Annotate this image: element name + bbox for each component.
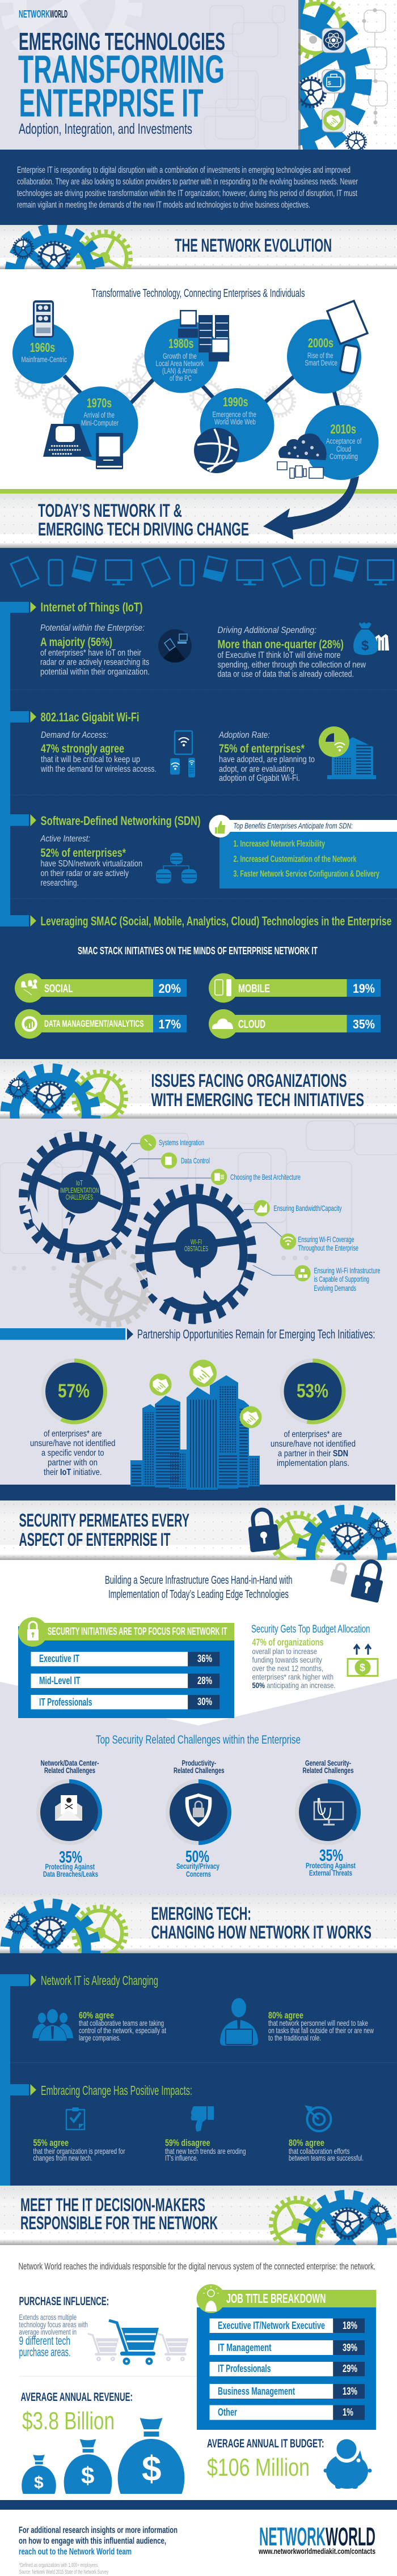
icon: briefcase tile: $ bbox=[328, 80, 331, 87]
chart: productivity challenges bbox=[168, 1759, 229, 1878]
bar: data analytics: DATA MANAGEMENT/ANALYTICS bbox=[44, 1018, 144, 1029]
footer: call to action: reach out to the Network World team bbox=[19, 2547, 132, 2557]
icon: handshake small right bbox=[239, 1406, 262, 1428]
heading: emerging tech: EMERGING TECH: bbox=[151, 1903, 251, 1924]
band: dark footer of issues bbox=[0, 1485, 395, 1500]
icon: terminal bbox=[43, 424, 92, 457]
bar: mobile: 19% bbox=[353, 981, 375, 996]
text: 55 percent agree bbox=[33, 2137, 125, 2162]
icon: team bbox=[32, 2009, 73, 2041]
donut: 53 percent bbox=[282, 1361, 344, 1422]
text: 57 percent detail: unsure/have not identified bbox=[30, 1439, 116, 1448]
text: 80 percent agree collaboration: 80% agree bbox=[289, 2137, 324, 2148]
gear: wi-fi obstacles: OBSTACLES bbox=[184, 1245, 208, 1253]
text: 80 percent agree collaboration: that collaboration efforts bbox=[289, 2146, 349, 2156]
panel: purchase influence: average involvement in bbox=[19, 2328, 77, 2336]
chart: general security challenges: General Security- bbox=[305, 1759, 351, 1767]
row: executive IT network executive: Executive IT/Network Executive bbox=[218, 2320, 325, 2331]
heading: today's network IT: EMERGING TECH DRIVING CHANGE bbox=[38, 519, 249, 539]
section: gigabit wifi: adopt, or are evaluating bbox=[219, 764, 294, 774]
section: gigabit wifi: adoption of Gigabit Wi-Fi. bbox=[219, 773, 300, 783]
icon: shield lock bbox=[185, 1793, 212, 1827]
heading: meet the IT decision-makers: RESPONSIBLE FOR THE NETWORK bbox=[20, 2213, 218, 2233]
icon: lock white bbox=[27, 1622, 39, 1640]
section: SDN bbox=[40, 814, 397, 889]
panel: security bbox=[0, 1558, 397, 1894]
chart: productivity challenges: 50% bbox=[185, 1848, 209, 1866]
row: other: 1% bbox=[343, 2407, 353, 2418]
text: 53 percent detail: of enterprises* are bbox=[284, 1430, 342, 1439]
gear: IoT implementation challenges: IMPLEMENTATION bbox=[60, 1187, 99, 1195]
text: 80 percent agree collaboration bbox=[289, 2137, 364, 2162]
icon: thumbs down bbox=[191, 2106, 214, 2132]
chart: network data center challenges: Related Challenges bbox=[44, 1766, 95, 1775]
panel: security initiatives table: SECURITY INITIATIVES ARE TOP FOCUS FOR NETWORK IT bbox=[48, 1626, 227, 1637]
text: 57 percent detail: partner with on bbox=[48, 1458, 98, 1468]
labels: timeline text: Emergence of the bbox=[212, 410, 256, 419]
text: 59 percent disagree: IT’s influence. bbox=[165, 2153, 198, 2162]
labels: timeline text: Smart Device bbox=[305, 359, 337, 367]
icon: cloud and devices bbox=[277, 433, 327, 478]
heading: meet the IT decision-makers bbox=[20, 2195, 218, 2233]
footer: call to action: For additional research insights or more information bbox=[19, 2526, 178, 2535]
chart: general security challenges: Related Challenges bbox=[303, 1766, 354, 1775]
heading: issues bbox=[151, 1070, 364, 1110]
row: IT management: IT Management bbox=[218, 2342, 271, 2353]
subheading: secure infrastructure: Building a Secure Infrastructure Goes Hand-in-Hand with bbox=[105, 1574, 293, 1587]
gear: grey background bbox=[73, 1249, 150, 1326]
stat: average annual revenue bbox=[20, 2391, 184, 2494]
labels: timeline text: 2000s bbox=[308, 335, 333, 350]
text: 60 percent agree bbox=[79, 2010, 166, 2042]
text: top budget allocation: enterprises* rank higher with bbox=[252, 1672, 333, 1681]
section: SDN: have SDN/network virtualization bbox=[41, 859, 142, 869]
banner: emerging tech bbox=[0, 1894, 397, 1953]
bar: data analytics bbox=[15, 1009, 187, 1039]
text: 60 percent agree: 60% agree bbox=[79, 2010, 114, 2021]
timeline bar bbox=[0, 602, 36, 926]
chart: general security challenges: External Threats bbox=[309, 1869, 352, 1877]
icon: money with arrows: $ bbox=[360, 1662, 365, 1673]
icon: money bag and chart: $ bbox=[361, 638, 369, 653]
footer: source note bbox=[19, 2562, 108, 2575]
panel: hero header: WORLD bbox=[50, 8, 67, 20]
section: internet of things: Internet of Things (IoT) bbox=[41, 600, 143, 614]
text: top budget allocation: 50% anticipating an increase. bbox=[252, 1681, 336, 1690]
banner: the network evolution bbox=[0, 225, 397, 269]
donut: 57 percent bbox=[43, 1361, 105, 1422]
subtitle: Adoption, Integration, and Investments bbox=[19, 120, 192, 137]
panel: purchase influence: PURCHASE INFLUENCE: bbox=[19, 2295, 109, 2308]
section: internet of things: spending, either through the collection of new bbox=[218, 660, 366, 670]
heading: today's network IT bbox=[38, 500, 249, 539]
stat: average annual IT budget: AVERAGE ANNUAL IT BUDGET: bbox=[207, 2437, 324, 2450]
labels: timeline text bbox=[22, 335, 362, 461]
icon: tablet and smartphone bbox=[327, 301, 368, 374]
chart: productivity challenges: Productivity- bbox=[181, 1759, 216, 1767]
section: gigabit wifi: Demand for Access: bbox=[41, 730, 108, 740]
callouts: issue labels: Evolving Demands bbox=[314, 1283, 356, 1293]
labels: timeline text: 2010s bbox=[330, 422, 356, 436]
section: SDN: on their radar or are actively bbox=[41, 869, 129, 878]
icon: mini computer bbox=[96, 433, 123, 469]
panel: purchase influence bbox=[19, 2295, 188, 2365]
panel: job title breakdown bbox=[196, 2284, 377, 2430]
title: TRANSFORMING bbox=[18, 47, 225, 91]
labels: timeline text: Cloud bbox=[336, 445, 351, 453]
panel: purchase influence: purchase areas. bbox=[19, 2346, 70, 2359]
bar: cloud bbox=[209, 1009, 381, 1039]
row: executive IT: Executive IT bbox=[39, 1653, 79, 1664]
icon: atom tile bbox=[322, 28, 345, 53]
footer: logo and url: NETWORK bbox=[259, 2522, 326, 2551]
icon: monitor stethoscope bbox=[314, 1798, 343, 1825]
row: executive IT bbox=[31, 1652, 219, 1666]
icon: handshake large bbox=[189, 1360, 217, 1387]
labels: timeline text: of the PC bbox=[170, 374, 192, 382]
icons: device row bbox=[11, 556, 394, 586]
icon: building and pie bbox=[319, 726, 376, 779]
labels: timeline text: 1980s bbox=[168, 336, 194, 351]
panel: purchase influence: 9 different tech bbox=[19, 2335, 70, 2348]
illustration: city buildings bbox=[130, 1360, 262, 1490]
icon: radar bbox=[158, 629, 192, 663]
section: internet of things: A majority (56%) bbox=[40, 636, 112, 649]
callouts: issue labels: Data Control bbox=[181, 1156, 210, 1165]
row: business management bbox=[210, 2384, 365, 2399]
footer: source note: Source: Network World 2015 State of the Network Survey bbox=[19, 2569, 108, 2575]
text: 53 percent detail bbox=[271, 1430, 356, 1468]
section: gigabit wifi bbox=[40, 710, 376, 783]
heading: embracing change: Embracing Change Has Positive Impacts: bbox=[41, 2083, 192, 2098]
text: 80 percent agree: 80% agree bbox=[268, 2010, 303, 2021]
section: gigabit wifi: with the demand for wireless access. bbox=[40, 764, 157, 774]
icon: wifi devices bbox=[170, 731, 195, 777]
footer: call to action bbox=[19, 2526, 178, 2557]
row: other bbox=[210, 2405, 365, 2420]
icon: money bag and chart bbox=[353, 622, 389, 655]
icon: money bags: $ bbox=[34, 2473, 44, 2492]
icon: floating padlocks bbox=[330, 1558, 387, 1603]
bar: social: SOCIAL bbox=[44, 983, 73, 995]
icon: person with laptop bbox=[220, 1998, 258, 2046]
gear: wi-fi obstacles bbox=[136, 1189, 252, 1319]
section: gigabit wifi: 75% of enterprises* bbox=[219, 742, 305, 755]
icon: briefcase tile bbox=[322, 70, 345, 93]
title: EMERGING TECHNOLOGIES bbox=[19, 28, 225, 56]
row: IT professionals bbox=[31, 1695, 219, 1709]
row: IT professionals: 30% bbox=[197, 1696, 212, 1707]
section: gigabit wifi: that it will be critical to keep up bbox=[41, 755, 140, 764]
banner: issues bbox=[0, 1059, 397, 1119]
icon: target bbox=[305, 2106, 331, 2131]
text: 80 percent agree bbox=[268, 2010, 374, 2042]
chart: network data center challenges: Protecting Against bbox=[45, 1863, 95, 1871]
chart: general security challenges: 35% bbox=[319, 1847, 343, 1865]
labels: timeline text: Arrival of the bbox=[84, 411, 115, 419]
text: 53 percent detail: a partner in their SDN bbox=[278, 1449, 348, 1459]
section: internet of things: potential within their organization. bbox=[40, 668, 150, 677]
bar: social: 20% bbox=[159, 981, 181, 996]
panel: hero header bbox=[0, 0, 397, 153]
chart: productivity challenges: Related Challenges bbox=[174, 1766, 225, 1775]
labels: timeline text: Computing bbox=[330, 452, 358, 461]
row: other: Other bbox=[218, 2407, 237, 2418]
banner: today's network IT bbox=[0, 476, 397, 548]
stat: average annual revenue: AVERAGE ANNUAL REVENUE: bbox=[20, 2391, 133, 2404]
row: mid-level IT: Mid-Level IT bbox=[39, 1675, 81, 1686]
section: internet of things: Potential within the Enterprise: bbox=[40, 623, 145, 633]
donut: 53 percent: 53% bbox=[297, 1380, 328, 1402]
gear: IoT implementation challenges: CHALLENGES bbox=[66, 1193, 93, 1201]
row: business management: 13% bbox=[343, 2386, 357, 2397]
bar: cloud: 35% bbox=[353, 1017, 375, 1031]
gear cluster: hero bbox=[298, 0, 372, 150]
title: ENTERPRISE IT bbox=[19, 80, 203, 125]
icon: globe bbox=[194, 428, 239, 473]
logo: Network World: NETWORK bbox=[19, 8, 50, 20]
text: top budget allocation bbox=[251, 1623, 370, 1690]
icon: money bags bbox=[22, 2418, 184, 2494]
labels: timeline text: 1970s bbox=[87, 396, 112, 410]
icon: money bags: $ bbox=[142, 2450, 161, 2489]
band: footer rule bbox=[0, 2500, 397, 2510]
banner: security bbox=[0, 1500, 397, 1560]
row: IT professionals: 29% bbox=[343, 2363, 357, 2374]
arrow: timeline to today bbox=[263, 476, 359, 539]
row: IT professionals: IT Professionals bbox=[218, 2363, 271, 2374]
callout: SDN benefits: 1. Increased Network Flexibility bbox=[234, 839, 325, 849]
icon: padlock bbox=[246, 1508, 280, 1553]
row: executive IT: 36% bbox=[197, 1653, 212, 1664]
icon: envelope bbox=[55, 1795, 82, 1821]
section: internet of things: of Executive IT think IoT will drive more bbox=[218, 651, 340, 660]
chart: productivity challenges: Security/Privacy bbox=[176, 1862, 219, 1871]
section: gigabit wifi: 802.11ac Gigabit Wi-Fi bbox=[41, 710, 140, 724]
chart: general security challenges bbox=[297, 1759, 358, 1877]
callouts: issue labels: Ensuring Bandwidth/Capacity bbox=[273, 1204, 341, 1213]
heading: partnership opportunities bbox=[0, 1327, 375, 1341]
text: 55 percent agree: 55% agree bbox=[33, 2137, 69, 2148]
text: 57 percent detail: a specific vendor to bbox=[41, 1448, 104, 1458]
callouts: issue labels: Systems Integration bbox=[159, 1138, 204, 1147]
bar: data analytics: 17% bbox=[159, 1017, 181, 1031]
section: SDN: researching. bbox=[41, 878, 79, 888]
chart: network data center challenges bbox=[39, 1759, 100, 1878]
stat: average annual revenue: $3.8 Billion bbox=[22, 2407, 115, 2435]
panel: purchase influence: technology focus areas with bbox=[19, 2320, 88, 2329]
labels: timeline text: 1990s bbox=[223, 394, 248, 409]
heading: network IT is already changing: Network IT is Already Changing bbox=[41, 1973, 158, 1988]
callouts: issue labels: Ensuring Wi-Fi Coverage bbox=[298, 1235, 354, 1244]
row: IT professionals: IT Professionals bbox=[39, 1697, 92, 1708]
timeline: network evolution bbox=[12, 300, 379, 480]
icon: money with arrows bbox=[348, 1645, 378, 1676]
labels: timeline text: Mini-Computer bbox=[81, 419, 119, 427]
text: 60 percent agree: control of the network, especially at bbox=[79, 2026, 166, 2035]
labels: timeline text: Growth of the bbox=[163, 352, 197, 360]
title bbox=[18, 28, 225, 125]
text: 57 percent detail: their IoT initiative. bbox=[44, 1468, 102, 1477]
panel: today's network tech bbox=[0, 548, 397, 1059]
subheading: secure infrastructure: Implementation of Today’s Leading Edge Technologies bbox=[108, 1588, 289, 1601]
callouts: issue labels: Throughout the Enterprise bbox=[298, 1243, 358, 1252]
icon: piggy bank bbox=[323, 2439, 372, 2489]
labels: timeline text: World Wide Web bbox=[214, 418, 256, 426]
callouts: issue labels bbox=[126, 1134, 381, 1293]
text: 53 percent detail: implementation plans. bbox=[277, 1459, 349, 1468]
icon: PCs and servers bbox=[178, 310, 229, 362]
subheading: top security challenges: Top Security Related Challenges within the Enterprise bbox=[96, 1733, 301, 1746]
callout: SDN benefits: Top Benefits Enterprises Anticipate from SDN: bbox=[234, 821, 353, 830]
chart: productivity challenges: Concerns bbox=[186, 1870, 211, 1878]
icon: handshake tile bbox=[322, 108, 345, 132]
section: SMAC bbox=[15, 914, 391, 1039]
row: business management: Business Management bbox=[218, 2386, 295, 2397]
labels: timeline text: Local Area Network bbox=[155, 359, 204, 368]
donut: 57 percent: 57% bbox=[58, 1380, 90, 1402]
row: mid-level IT: 28% bbox=[197, 1675, 212, 1686]
row: mid-level IT bbox=[31, 1674, 219, 1688]
gear: IoT implementation challenges: IoT bbox=[76, 1179, 83, 1187]
footer: source note: *Defined as organizations with 1,000+ employees. bbox=[19, 2562, 99, 2569]
gear: wi-fi obstacles: WI-FI bbox=[191, 1238, 202, 1246]
callout: SDN benefits bbox=[209, 815, 397, 889]
panel: security initiatives table bbox=[18, 1617, 234, 1718]
text: 60 percent agree: large companies. bbox=[79, 2033, 121, 2042]
text: 55 percent agree: changes from new tech. bbox=[33, 2153, 92, 2162]
section: internet of things: radar or are actively researching its bbox=[40, 657, 149, 668]
text: 55 percent agree: that their organization is prepared for bbox=[33, 2146, 125, 2156]
heading: today's network IT: TODAY’S NETWORK IT & bbox=[38, 500, 182, 521]
panel: network IT changing bbox=[0, 1953, 397, 2186]
icon: handshake small left bbox=[150, 1374, 171, 1396]
icon: mainframe bbox=[33, 300, 54, 338]
section: SDN: Active Interest: bbox=[40, 834, 90, 844]
row: executive IT network executive: 18% bbox=[343, 2320, 357, 2331]
heading: meet the IT decision-makers: MEET THE IT DECISION-MAKERS bbox=[20, 2195, 205, 2215]
chart: general security challenges: Protecting Against bbox=[306, 1861, 356, 1870]
panel: issues bbox=[0, 1119, 397, 1485]
heading: security: ASPECT OF ENTERPRISE IT bbox=[19, 1529, 171, 1550]
labels: timeline text: Rise of the bbox=[307, 351, 333, 360]
panel: job title breakdown: JOB TITLE BREAKDOWN bbox=[226, 2291, 326, 2306]
icon: shopping carts bbox=[88, 2320, 188, 2365]
chart: network data center challenges: 35% bbox=[59, 1848, 82, 1867]
chart: network data center challenges: Network/Data Center- bbox=[41, 1759, 99, 1767]
bar: social bbox=[15, 974, 187, 1003]
heading: security: SECURITY PERMEATES EVERY bbox=[19, 1510, 189, 1531]
text: top budget allocation: overall plan to increase bbox=[252, 1647, 317, 1656]
text: 59 percent disagree bbox=[165, 2137, 246, 2162]
row: IT management bbox=[210, 2340, 365, 2355]
text: 80 percent agree: to the traditional role. bbox=[268, 2033, 321, 2042]
panel: intro text bbox=[0, 150, 397, 225]
section: internet of things: data or use of data that is already collected. bbox=[218, 670, 354, 679]
row: IT professionals bbox=[210, 2362, 365, 2377]
bar: mobile: MOBILE bbox=[238, 983, 270, 995]
row: IT management: 39% bbox=[343, 2342, 357, 2353]
stat: average annual IT budget bbox=[207, 2437, 372, 2489]
section: SDN: 52% of enterprises* bbox=[41, 847, 126, 860]
text: 59 percent disagree: 59% disagree bbox=[165, 2137, 210, 2148]
labels: timeline text: Acceptance of bbox=[326, 437, 362, 445]
text: 57 percent detail bbox=[30, 1429, 116, 1477]
timeline bar bbox=[0, 1974, 36, 2186]
chart: network data center challenges: Data Breaches/Leaks bbox=[43, 1870, 98, 1878]
bar: mobile bbox=[209, 974, 381, 1003]
text: 59 percent disagree: that new tech trends are eroding bbox=[165, 2146, 246, 2156]
section: gigabit wifi: 47% strongly agree bbox=[41, 742, 124, 755]
heading: security bbox=[19, 1510, 189, 1550]
text: 60 percent agree: that collaborative teams are taking bbox=[79, 2018, 164, 2027]
section: internet of things bbox=[40, 600, 389, 679]
text: 80 percent agree collaboration: between teams are successful. bbox=[289, 2153, 364, 2162]
gear: IoT implementation challenges bbox=[17, 1137, 136, 1258]
heading: emerging tech bbox=[151, 1903, 371, 1942]
stat: average annual IT budget: $106 Million bbox=[207, 2454, 310, 2481]
labels: timeline text: (LAN) & Arrival bbox=[162, 367, 197, 375]
bar: cloud: CLOUD bbox=[238, 1018, 265, 1031]
labels: timeline text: Mainframe-Centric bbox=[22, 355, 67, 364]
section: internet of things: of enterprises* have IoT on their bbox=[40, 648, 141, 658]
text: top budget allocation: funding towards security bbox=[252, 1655, 322, 1664]
section: internet of things: More than one-quarter (28%) bbox=[218, 638, 344, 651]
banner: meet the IT decision-makers bbox=[0, 2186, 397, 2245]
icon: lightbulb person bbox=[203, 2286, 219, 2311]
icon: clipboard bbox=[66, 2107, 85, 2129]
callouts: issue labels: Choosing the Best Architecture bbox=[230, 1172, 301, 1181]
section: SDN: Software-Defined Networking (SDN) bbox=[41, 814, 201, 828]
panel: purchase influence: Extends across multiple bbox=[19, 2313, 77, 2322]
section: gigabit wifi: have adopted, are planning to bbox=[219, 755, 315, 764]
labels: timeline text: 1960s bbox=[30, 340, 55, 355]
icon: money bags: $ bbox=[81, 2462, 94, 2489]
text: 53 percent detail: unsure/have not identified bbox=[271, 1439, 356, 1449]
text: 57 percent detail: of enterprises* are bbox=[44, 1429, 102, 1439]
text: top budget allocation: 47% of organizations bbox=[252, 1636, 324, 1648]
footer: call to action: on how to engage with this influential audience, bbox=[19, 2536, 166, 2546]
section: internet of things: Driving Additional Spending: bbox=[218, 626, 316, 635]
subheading: secure infrastructure bbox=[105, 1574, 293, 1601]
section: gigabit wifi: Adoption Rate: bbox=[218, 730, 270, 740]
icon: database network bbox=[156, 853, 197, 883]
text: top budget allocation: over the next 12 months, bbox=[252, 1664, 323, 1673]
